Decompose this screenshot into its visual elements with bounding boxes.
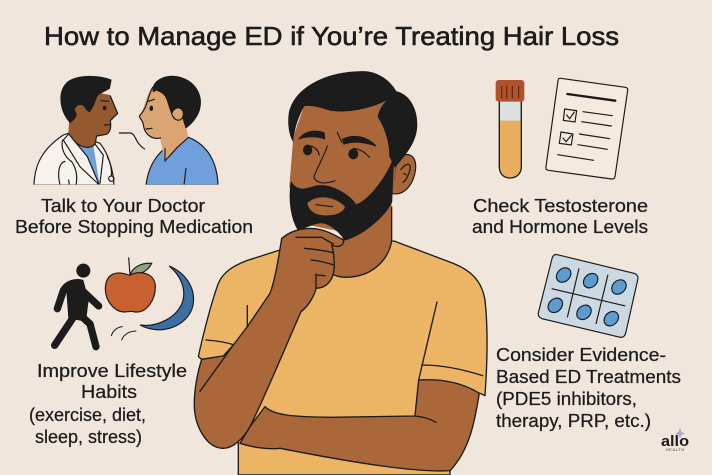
beard [290,160,393,240]
patient face [139,87,188,162]
patient hair [153,76,200,128]
t-shirt [198,241,487,475]
label: check testosterone [472,195,648,237]
nose [314,146,335,183]
eyes [303,145,312,155]
label: lifestyle habits: (exercise, diet, [29,404,146,425]
label: consider treatments: (PDE5 inhibitors, [496,388,637,409]
icon: motion lines [111,327,136,340]
label: check testosterone: and Hormone Levels [472,216,648,237]
figure: thoughtful man [194,72,487,475]
logo: allo health: allo [661,434,689,450]
lips [307,197,345,215]
icon: walking person [55,264,99,347]
label: check testosterone: Check Testosterone [473,195,648,216]
label: lifestyle habits: Improve Lifestyle [37,360,187,381]
label: lifestyle habits: sleep, stress) [35,426,142,447]
label: consider treatments: Consider Evidence- [496,344,666,365]
doctor lapels and stethoscope [63,134,103,185]
icon: blister pack [538,254,638,337]
logo: allo health [661,428,689,452]
fade at icon base [30,185,223,187]
title: How to Manage ED if You’re Treating Hair Loss [44,21,619,51]
label: lifestyle habits: Habits [81,381,137,402]
label: consider treatments: therapy, PRP, etc.) [496,410,651,431]
icon: crescent moon [140,266,194,330]
icon: apple [105,257,155,312]
brows [299,131,325,139]
face [289,72,417,240]
label: talk to your doctor: Talk to Your Doctor [41,195,205,216]
back arm crossing body [240,380,479,471]
ear [392,155,416,194]
hand and forearm on chin [194,228,344,448]
icon: doctor and patient [30,76,223,187]
label: talk to your doctor [15,195,253,237]
icon: checklist [546,78,628,179]
label: talk to your doctor: Before Stopping Medication [15,216,253,237]
doctor hair [61,76,111,122]
label: lifestyle habits [29,360,187,447]
label: consider treatments: Based ED Treatments [496,366,681,387]
speech line [119,133,145,149]
hair [289,72,417,167]
doctor neck and head [68,90,118,148]
logo: allo health: HEALTH [666,448,684,452]
neck [328,203,392,277]
doctor coat [34,133,114,185]
doctor scrub [75,142,99,183]
icon: test tube [496,80,524,178]
label: consider treatments [496,344,681,431]
patient shirt [146,137,218,185]
